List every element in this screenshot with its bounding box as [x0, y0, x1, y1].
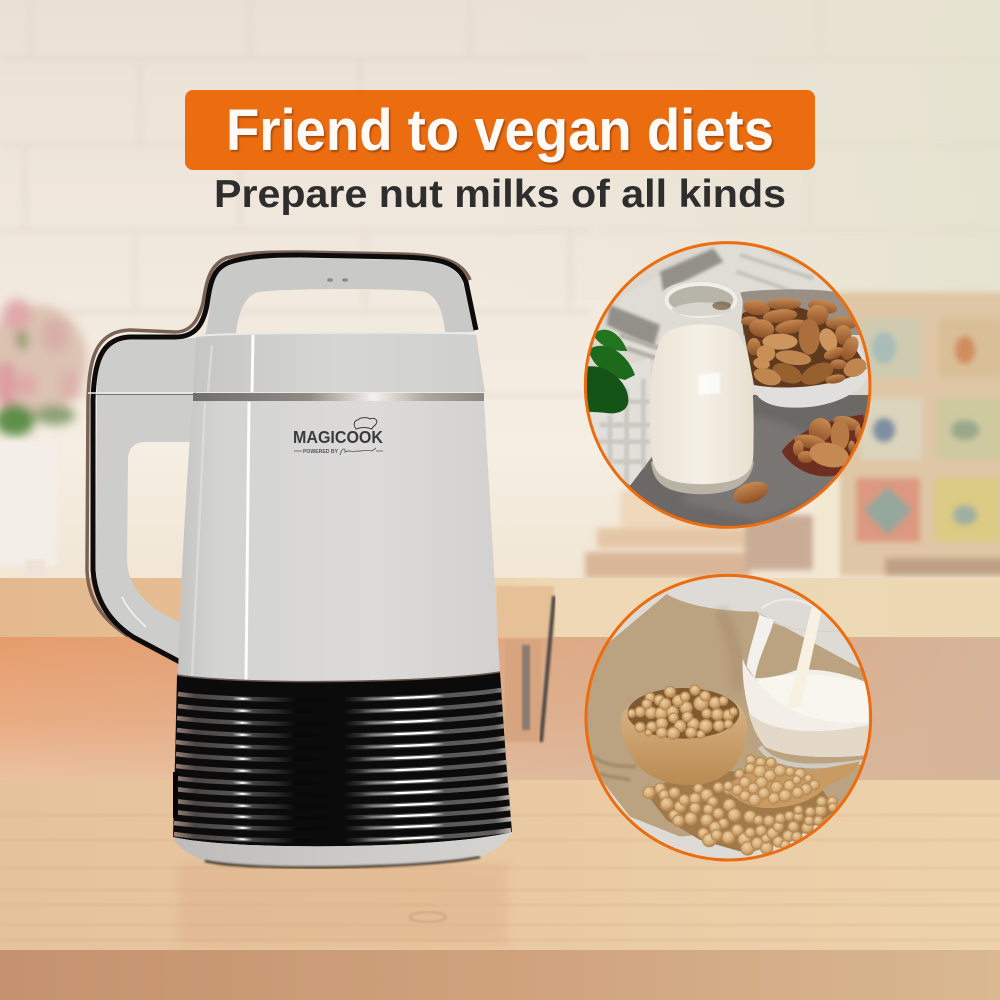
glass	[747, 599, 839, 678]
bottom plate	[173, 832, 512, 868]
bowl with almonds	[752, 335, 868, 408]
handle outer copper edge	[87, 252, 470, 636]
two handle dots	[327, 278, 348, 282]
milk bottle	[651, 462, 754, 494]
reflection lines	[246, 335, 253, 680]
small red bowl	[782, 414, 867, 476]
flower plant	[0, 299, 87, 576]
milk in glass	[743, 658, 868, 757]
lower body	[178, 400, 500, 683]
logo: POWERED BY	[303, 449, 339, 455]
metal bracket	[496, 586, 554, 745]
thin seam	[177, 672, 500, 682]
side handle	[96, 338, 197, 665]
bottle neck glass	[663, 282, 743, 322]
ribbed base	[173, 672, 512, 846]
side power block	[173, 772, 178, 818]
scattered soybeans	[643, 782, 837, 855]
bean underlay	[643, 771, 837, 853]
towel upper	[603, 245, 833, 362]
circle photo: soy milk	[580, 575, 873, 860]
handle black edge	[93, 255, 476, 662]
lid	[193, 333, 485, 392]
circle border	[585, 243, 870, 527]
soup maker appliance	[87, 252, 512, 868]
burlap sack	[580, 594, 873, 837]
chef hat	[354, 418, 377, 429]
blurred pedestal	[585, 480, 839, 580]
towel lower	[587, 358, 653, 486]
loose almond	[734, 482, 768, 504]
rib grey bands	[174, 690, 511, 841]
silver band	[193, 393, 484, 401]
wooden bowl	[621, 689, 747, 785]
logo: MAGICOOK	[293, 427, 383, 447]
rib highlights	[174, 690, 511, 841]
title text: Friend to vegan diets	[226, 98, 774, 163]
wall below shelf	[0, 637, 1000, 782]
tiled wooden frame	[838, 292, 1000, 576]
wooden spoon	[723, 762, 859, 808]
milk stream	[787, 607, 822, 708]
white pot	[0, 442, 57, 566]
subtitle: Prepare nut milks of all kinds	[214, 173, 786, 216]
circle photo: almond milk	[585, 243, 880, 535]
title banner	[185, 90, 815, 170]
leaves	[593, 330, 627, 351]
top handle	[205, 258, 474, 335]
shelf	[0, 578, 1000, 638]
stone table	[626, 395, 868, 526]
circle border	[586, 575, 871, 860]
handle highlights	[122, 597, 146, 627]
under shadow	[205, 857, 480, 868]
logo	[293, 418, 383, 455]
wooden table	[0, 780, 1000, 952]
